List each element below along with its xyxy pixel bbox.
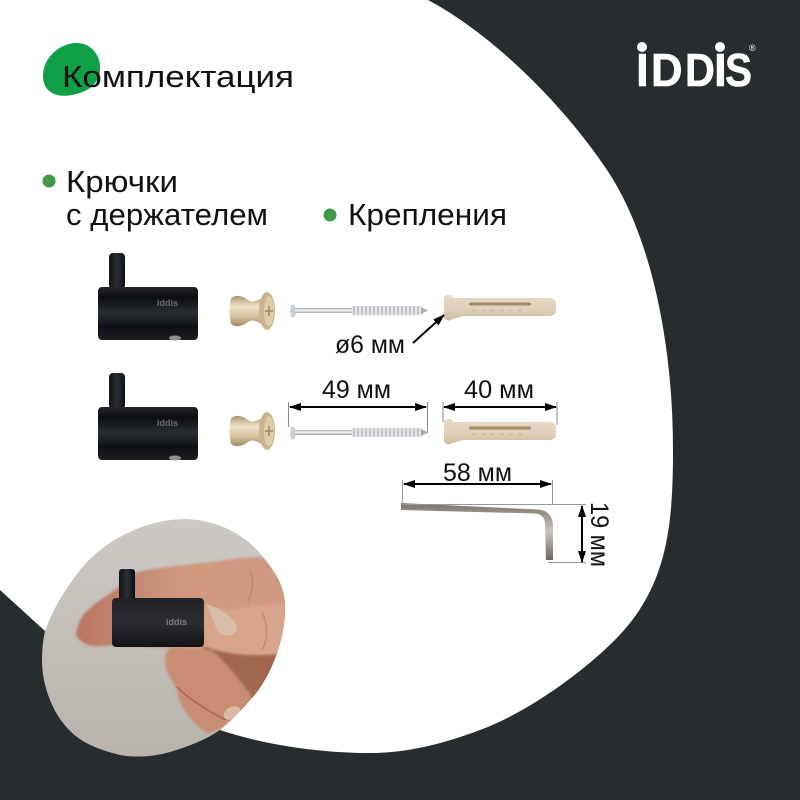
dimension: key length 58 mm: 58 мм (443, 459, 512, 487)
shadow between fingers (200, 646, 285, 710)
product: knob 1 (230, 292, 275, 330)
thumb (204, 604, 286, 656)
product: hook 2 (98, 373, 198, 460)
logo: IDDIS: D (685, 45, 715, 97)
photo: hook held in hand: iddis (166, 617, 187, 627)
knuckle crease (248, 570, 266, 650)
callout: diameter 6 mm (335, 315, 444, 359)
product: hex key (401, 503, 553, 560)
title (43, 43, 294, 96)
dimension: screw length 49 mm: 49 мм (322, 376, 391, 404)
thumb nail (206, 604, 237, 635)
dimension: key length 58 mm (402, 459, 586, 562)
product: screw 2 (290, 426, 428, 440)
icon: green title blob (43, 43, 100, 96)
product: knob 2 (230, 412, 275, 450)
logo: IDDIS: I (714, 44, 727, 96)
title text: Комплектация (62, 59, 294, 94)
dimension: key height 19 mm: 19 мм (585, 502, 613, 567)
hook body (112, 598, 204, 647)
finger crease (177, 687, 226, 720)
hand back and index finger (76, 557, 295, 660)
dimension: dowel length 40 mm: 40 мм (464, 376, 534, 404)
product: hook 1 (98, 253, 198, 340)
legend: fasteners: Крепления (348, 197, 507, 232)
lower fingers (165, 647, 252, 733)
product: screw 1 (290, 304, 428, 318)
legend: hooks with holder (42, 164, 268, 232)
logo: IDDIS: ® (749, 43, 756, 53)
callout: diameter 6 mm: ø6 мм (335, 331, 405, 359)
lower finger nail (224, 706, 240, 720)
logo: IDDIS: D (651, 44, 683, 96)
dimension: dowel length 40 mm (443, 376, 557, 425)
white curved panel (0, 0, 673, 753)
photo: hook held in hand (42, 519, 286, 756)
logo: IDDIS (636, 42, 756, 97)
dimension: screw length 49 mm (288, 376, 428, 433)
legend: hooks with holder: Крючки (66, 164, 178, 199)
logo: IDDIS: I (636, 44, 649, 96)
product: dowel 1 (444, 295, 556, 321)
product: dowel 2 (444, 419, 556, 445)
logo: IDDIS: S (725, 46, 752, 97)
legend: hooks with holder: с держателем (66, 197, 268, 232)
hook post (119, 569, 135, 598)
